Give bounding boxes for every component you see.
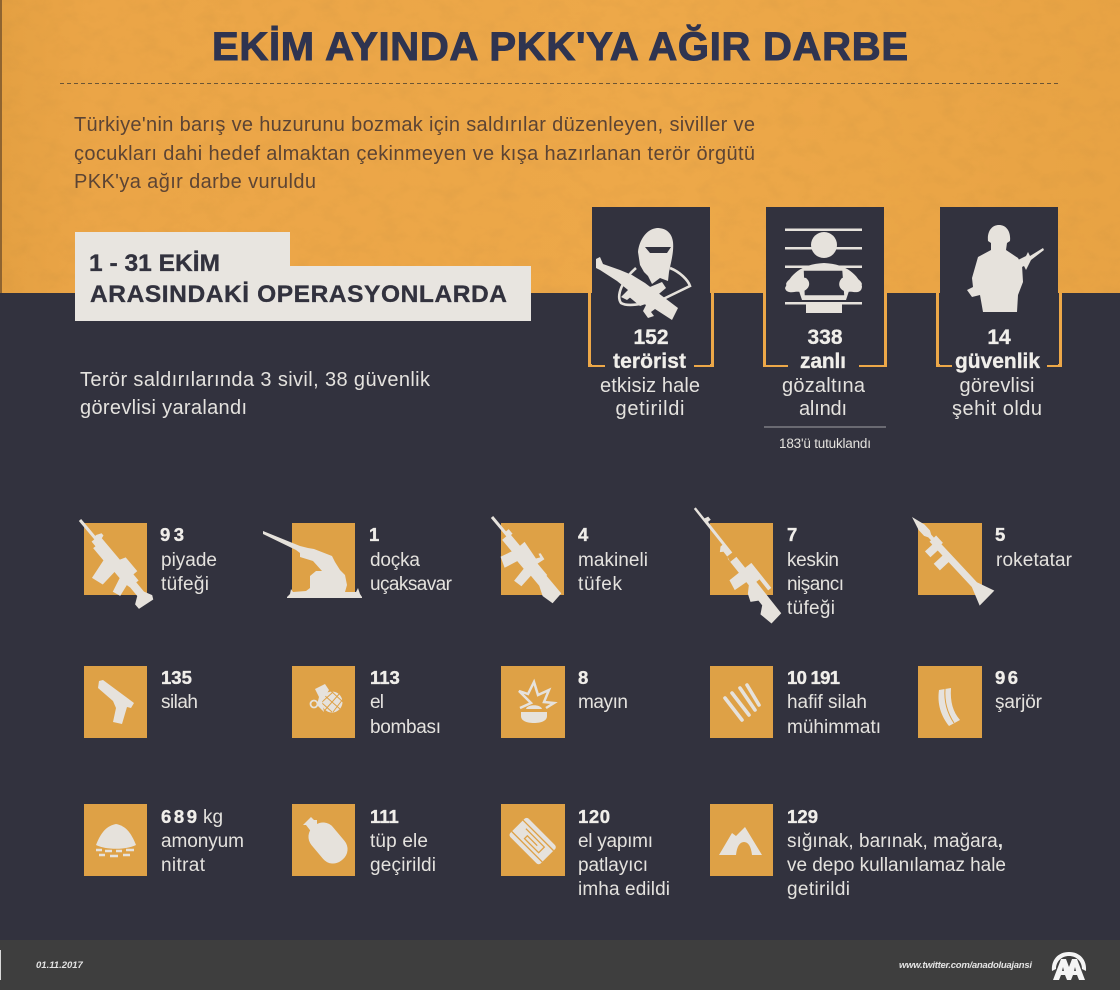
item: mines: 8 [578, 667, 588, 688]
icon: gas cylinder [303, 817, 353, 869]
item: machine guns: makineli [578, 550, 648, 571]
item: sniper rifles: 7 [787, 524, 797, 545]
item: infantry rifles [59, 513, 217, 621]
intro text [74, 114, 755, 193]
item: sniper rifles: tüfeği [787, 598, 835, 619]
item: improvised explosives [501, 804, 670, 900]
icon: rocket launcher [900, 510, 995, 609]
panel: terrorists: getirildi [616, 398, 684, 420]
item: machine guns [474, 508, 648, 613]
item: mines [501, 666, 628, 738]
intro text: çocukları dahi hedef almaktan çekinmeyen ve kışa hazırlanan terör örgütü [74, 143, 755, 165]
background: dark lower band [0, 293, 1120, 940]
item: anti-aircraft gun: uçaksavar [370, 574, 453, 595]
item: gas cylinders: 111 [370, 806, 399, 827]
item: anti-aircraft gun: 1 [369, 524, 379, 545]
icon: curved magazine [938, 688, 960, 726]
item: machine guns: 4 [578, 524, 589, 545]
item: sniper rifles [679, 502, 844, 628]
item: improvised explosives: imha edildi [578, 879, 670, 900]
footer [0, 940, 1120, 990]
item: magazines [918, 666, 1043, 738]
icon: cave [719, 827, 762, 855]
item: pistols: silah [161, 692, 198, 713]
item: shelters: ve depo kullanılamaz hale [787, 855, 1006, 876]
background: orange upper band [0, 0, 1120, 293]
item: gas cylinders: geçirildi [370, 855, 436, 876]
panel: suspects [764, 207, 886, 451]
panel number: 338 [807, 326, 843, 349]
panel: terrorists: etkisiz hale [600, 375, 700, 397]
item: gas cylinders [292, 804, 436, 876]
item: pistols [84, 666, 198, 738]
panel: terrorists [590, 207, 712, 420]
icon: exploding mine [519, 682, 554, 723]
icon: masked militant [596, 228, 690, 320]
icon: anti-aircraft gun [263, 531, 362, 598]
twitter address: www.twitter.com/anadoluajansi [899, 960, 1032, 971]
item: ammunition [710, 666, 881, 738]
date range label: ARASINDAKİ OPERASYONLARDA [90, 281, 507, 308]
date range label [75, 232, 531, 321]
item: ammunition: hafif silah [787, 692, 867, 713]
date: 01.11.2017 [36, 960, 84, 971]
panel: security personnel [938, 207, 1060, 420]
wounded text: Terör saldırılarında 3 sivil, 38 güvenlik [80, 369, 431, 391]
icon: explosive bundle [508, 817, 557, 865]
item: anti-aircraft gun: doçka [370, 550, 420, 571]
icon: bullets [725, 685, 759, 720]
icon: sniper rifle [679, 502, 789, 628]
item: infantry rifles: tüfeği [161, 574, 209, 595]
item: anti-aircraft gun [263, 523, 453, 598]
item: ammonium nitrate: amonyum [161, 831, 244, 852]
item: rocket launchers: 5 [995, 524, 1005, 545]
item: sniper rifles: keskin [787, 550, 839, 571]
item: ammunition: mühimmatı [787, 717, 881, 738]
panel: security personnel: görevlisi [960, 375, 1034, 397]
item: mines: mayın [578, 692, 628, 713]
wounded text [80, 369, 431, 419]
panel: suspects: gözaltına [782, 375, 866, 397]
item: gas cylinders: tüp ele [370, 831, 428, 852]
item: hand grenades: el [370, 692, 384, 713]
item: shelters [710, 804, 1006, 900]
icon: machine gun [474, 508, 570, 613]
intro text: PKK'ya ağır darbe vuruldu [74, 171, 316, 193]
icon: AA logo [1052, 952, 1086, 980]
wounded text: görevlisi yaralandı [80, 397, 247, 419]
item: pistols: 135 [161, 667, 192, 688]
icon: mugshot [785, 228, 862, 313]
item: improvised explosives: el yapımı [578, 831, 653, 852]
date range label: 1 - 31 EKİM [89, 250, 220, 277]
panel: security personnel: güvenlik [955, 350, 1040, 373]
panel: security personnel: şehit oldu [952, 398, 1042, 420]
item: shelters: sığınak, barınak, mağara, [787, 831, 1003, 852]
intro text: Türkiye'nin barış ve huzurunu bozmak için saldırılar düzenleyen, siviller ve [74, 114, 755, 136]
panel number: 152 [633, 326, 669, 349]
item: hand grenades: 113 [370, 667, 400, 688]
item: ammunition: 10 191 [787, 667, 840, 688]
item: improvised explosives: patlayıcı [578, 855, 648, 876]
icon: hand grenade [310, 684, 343, 712]
item: ammonium nitrate: 689 [161, 806, 197, 827]
panel: terrorists: terörist [613, 350, 686, 373]
item: shelters: getirildi [787, 879, 850, 900]
panel: suspects: 183'ü tutuklandı [779, 436, 871, 451]
item: hand grenades: bombası [370, 717, 441, 738]
item: infantry rifles: 93 [160, 524, 184, 545]
panel number: 14 [987, 326, 1011, 349]
title: EKİM AYINDA PKK'YA AĞIR DARBE [212, 23, 908, 69]
panel: suspects: zanlı [800, 350, 846, 373]
item: shelters: 129 [787, 806, 818, 827]
item: infantry rifles: piyade [161, 550, 217, 571]
icon: soldier [967, 225, 1044, 312]
item: magazines: şarjör [995, 692, 1043, 713]
icon: powder pile [96, 824, 136, 856]
icon: pistol [98, 680, 134, 724]
item: machine guns: tüfek [578, 574, 622, 595]
panel: suspects: alındı [799, 398, 847, 420]
item: ammonium nitrate: kg [203, 807, 223, 828]
icon: rifle [59, 513, 158, 621]
item: magazines: 96 [995, 667, 1018, 688]
item: hand grenades [292, 666, 441, 738]
item: sniper rifles: nişancı [787, 574, 844, 595]
item: ammonium nitrate [84, 804, 244, 876]
item: improvised explosives: 120 [578, 806, 610, 827]
item: ammonium nitrate: nitrat [161, 855, 206, 876]
item: rocket launchers [900, 510, 1073, 609]
item: rocket launchers: roketatar [996, 550, 1073, 571]
